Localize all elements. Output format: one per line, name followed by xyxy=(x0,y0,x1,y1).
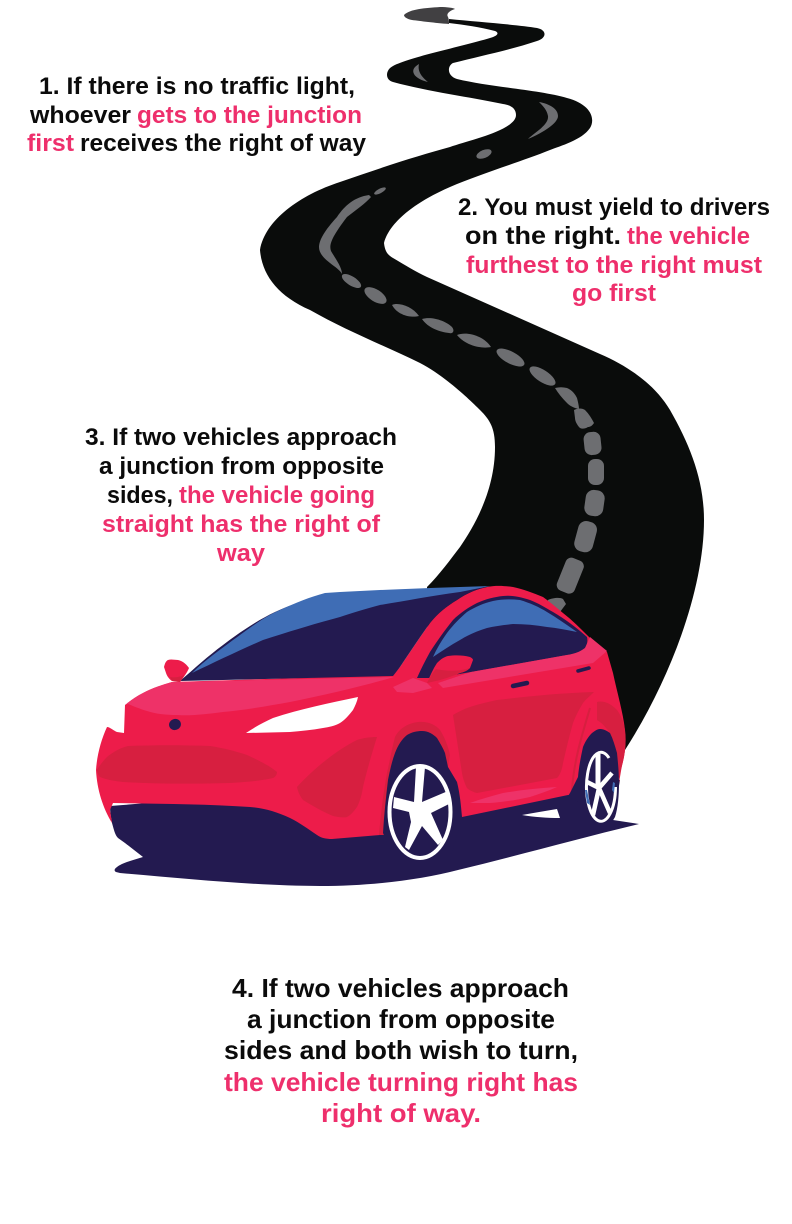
side vent xyxy=(297,737,377,817)
front wheel arch xyxy=(379,722,450,835)
rule 2: yield to drivers on the right xyxy=(458,194,770,307)
rule 1: no traffic light xyxy=(27,73,367,157)
rule 1: no traffic light: whoever xyxy=(29,102,131,129)
rule 1: no traffic light: first xyxy=(27,130,74,157)
side window reflection xyxy=(433,599,577,657)
rule 1: no traffic light: receives the right of way xyxy=(80,130,367,157)
car shadow and underbody xyxy=(110,760,639,886)
rule 2: yield to drivers on the right: go first xyxy=(572,280,656,307)
rule 2: yield to drivers on the right: 2. You must yield to drivers xyxy=(458,194,770,221)
rule 3: opposite sides, going straight: a junction from opposite xyxy=(99,453,384,480)
car body xyxy=(96,586,626,839)
rear arch shade xyxy=(572,702,625,790)
door handles xyxy=(513,668,589,686)
rule 3: opposite sides, going straight: 3. If two vehicles approach xyxy=(85,424,397,451)
rule 1: no traffic light: 1. If there is no traffic light, xyxy=(39,73,355,100)
rule 2: yield to drivers on the right: furthest to the right must xyxy=(466,252,762,279)
front wheel xyxy=(390,766,451,858)
pillar base highlight xyxy=(393,678,432,693)
rule 2: yield to drivers on the right: the vehicle xyxy=(627,223,750,250)
rule 4: both vehicles turning: sides and both wish to turn, xyxy=(224,1035,578,1065)
rule 4: both vehicles turning: the vehicle turning right has xyxy=(224,1067,578,1097)
door panel xyxy=(453,692,594,793)
rule 4: both vehicles turning xyxy=(224,973,578,1128)
rule 3: opposite sides, going straight: way xyxy=(216,540,266,567)
headlight xyxy=(246,697,358,733)
rule 2: yield to drivers on the right: on the right. xyxy=(465,222,621,250)
emblem xyxy=(167,717,183,732)
sill highlight xyxy=(470,787,557,803)
rule 3: opposite sides, going straight: the vehicle going xyxy=(179,482,375,509)
windshield reflection xyxy=(192,586,490,673)
rule 4: both vehicles turning: a junction from opposite xyxy=(247,1004,555,1034)
lane markings xyxy=(319,64,606,612)
rear wheel xyxy=(585,752,616,821)
rule 3: opposite sides, going straight xyxy=(85,424,397,567)
right mirror xyxy=(427,655,473,683)
rule 1: no traffic light: gets to the junction xyxy=(137,102,362,129)
winding road xyxy=(260,7,704,800)
side strip highlight xyxy=(438,637,607,688)
windshield xyxy=(180,587,487,681)
side window xyxy=(417,596,587,678)
rule 3: opposite sides, going straight: straight has the right of xyxy=(102,511,381,538)
rear wheel arch xyxy=(568,729,619,822)
left mirror xyxy=(164,660,189,682)
red car xyxy=(96,586,639,886)
rule 4: both vehicles turning: right of way. xyxy=(321,1098,481,1128)
grille xyxy=(97,745,277,784)
ground highlight xyxy=(522,809,560,818)
rule 4: both vehicles turning: 4. If two vehicles approach xyxy=(232,973,569,1003)
hood highlight xyxy=(125,677,394,715)
rule 3: opposite sides, going straight: sides, xyxy=(107,482,173,509)
